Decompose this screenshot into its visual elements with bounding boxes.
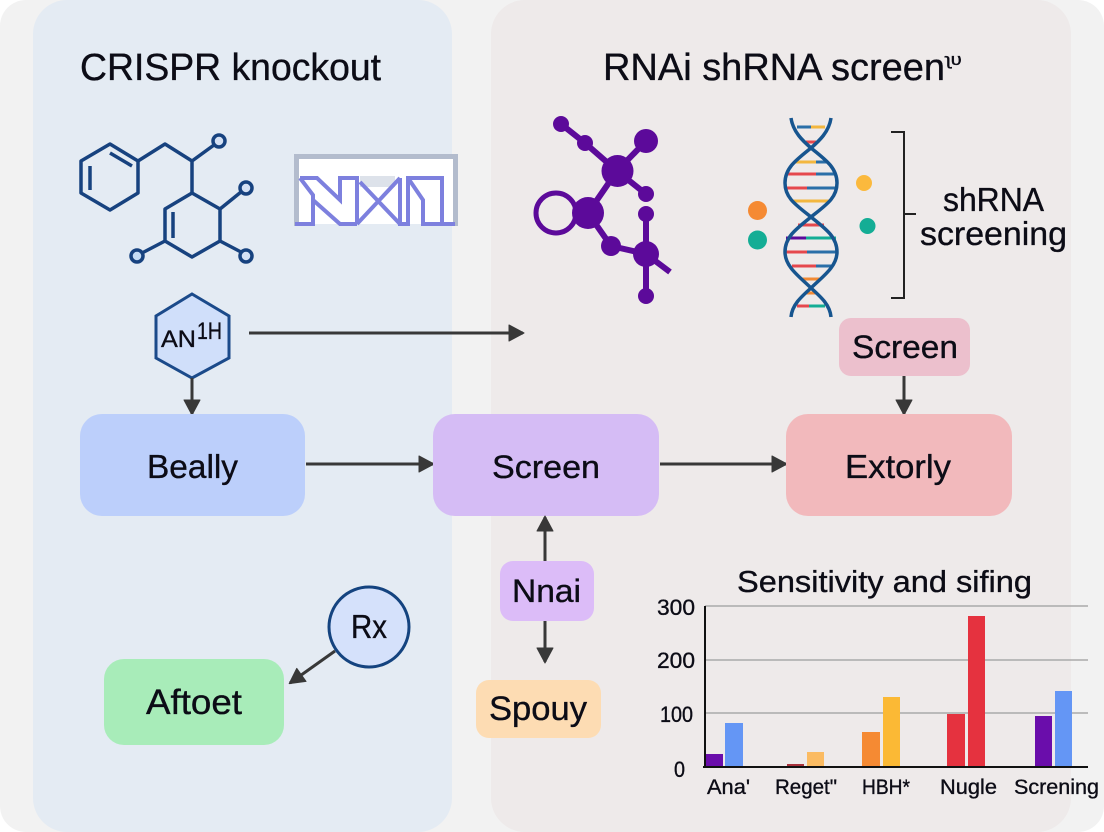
heading: RNAi shRNA screen: ʅʋ <box>944 50 962 69</box>
heading: RNAi shRNA screen: RNAi shRNA screen <box>603 47 945 89</box>
box: Spouy: Spouy <box>489 690 587 728</box>
arrow: Nnai to Screen <box>544 517 546 561</box>
y axis labels: 200 <box>657 648 695 673</box>
box: Aftoet: Aftoet <box>146 683 242 722</box>
chart title: Sensitivity and sifing <box>737 564 1032 599</box>
arrow: Nnai to Spouy <box>544 621 546 662</box>
x axis labels <box>707 776 1099 799</box>
x axis labels: Reget" <box>775 776 837 799</box>
icon: orange dot <box>748 201 767 220</box>
arrow: Beally to Screen <box>306 462 433 466</box>
label: shRNA screening <box>920 181 1067 252</box>
arrow: hexagon to Beally <box>190 378 194 414</box>
arrow: Rx to Aftoet <box>290 651 335 683</box>
icon: yellow dot <box>856 175 872 191</box>
x axis labels: Nugle <box>940 776 997 799</box>
icon: blue molecule structure <box>81 135 252 262</box>
icon: green dot <box>748 230 767 250</box>
box: Aftoet <box>104 659 284 745</box>
box: Screen top: Screen <box>852 329 958 365</box>
icon: teal dot <box>860 218 876 234</box>
label: shRNA screening: shRNA <box>943 181 1044 218</box>
icon: Rx circle <box>329 587 409 667</box>
y axis labels <box>657 595 695 782</box>
icon: NXN logo box <box>295 156 456 226</box>
icon: hexagon AN1H: AN <box>161 326 196 353</box>
panel: CRISPR knockout <box>33 0 452 832</box>
icon: DNA helix <box>785 118 837 317</box>
icon: hexagon AN1H: 1H <box>197 318 222 345</box>
box: Screen top <box>839 318 970 376</box>
box: Beally <box>80 414 305 516</box>
arrow: hexagon to right panel <box>249 332 523 334</box>
box: Screen centre <box>433 414 659 516</box>
x axis labels: HBH* <box>862 776 910 799</box>
x axis labels: Ana' <box>707 776 750 799</box>
bar chart: Sensitivity and sifing <box>657 564 1099 799</box>
y axis labels: 300 <box>657 595 695 620</box>
box: Screen centre: Screen <box>492 449 600 485</box>
bars <box>706 616 1072 767</box>
arrow: Screen to Extorly main <box>660 462 786 466</box>
heading: CRISPR knockout: CRISPR knockout <box>80 47 381 89</box>
box: Beally: Beally <box>147 448 238 485</box>
icon: purple molecule <box>536 116 670 304</box>
box: Nnai <box>500 561 594 621</box>
arrow: Screen to Extorly <box>902 376 906 414</box>
bracket <box>891 132 916 298</box>
y axis labels: 100 <box>660 702 693 727</box>
panel: RNAi shRNA screen <box>491 0 1071 832</box>
box: Extorly: Extorly <box>845 448 952 485</box>
x axis labels: Screning <box>1014 776 1099 799</box>
label: shRNA screening: screening <box>920 215 1067 252</box>
icon: Rx circle: Rx <box>351 608 387 645</box>
box: Extorly <box>786 414 1012 516</box>
box: Nnai: Nnai <box>512 573 581 609</box>
box: Spouy <box>476 680 601 738</box>
y axis labels: 0 <box>674 757 685 782</box>
icon: hexagon AN1H <box>156 294 229 378</box>
